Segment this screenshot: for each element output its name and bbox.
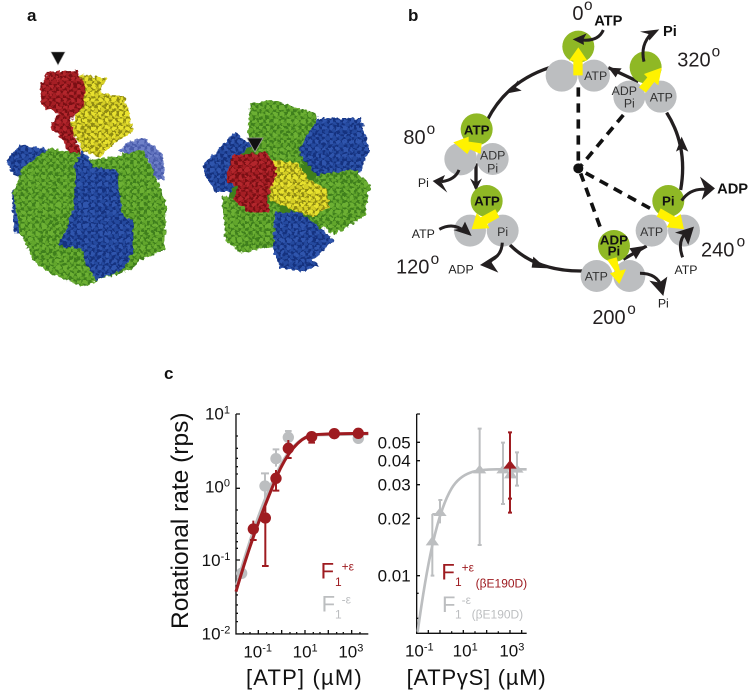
legend F1 -epsilon betaE190D: (βE190D) (472, 608, 523, 622)
x tick labels: 3 (357, 642, 363, 654)
icon: marker triangle (51, 52, 65, 65)
icon: marker triangle top view (247, 138, 263, 152)
y tick labels: -2 (221, 624, 230, 636)
state 120 degrees: ATP (474, 193, 500, 208)
state 200 degrees (581, 230, 669, 329)
x tick labels: 3 (518, 642, 524, 654)
state 320 degrees: o (712, 44, 720, 61)
y tick labels: 0.02 (378, 509, 411, 528)
x tick labels: 10 (338, 642, 357, 661)
x tick labels: 10 (453, 642, 472, 661)
legend F1 +epsilon betaE190D: 1 (455, 575, 462, 589)
y tick labels: 0.05 (378, 433, 411, 452)
state 240 degrees: ADP (717, 181, 748, 197)
legend F1 +epsilon: 1 (335, 575, 342, 589)
x tick labels: 10 (405, 642, 424, 661)
y tick labels: 10 (202, 551, 221, 570)
red series (503, 432, 517, 513)
gray series (418, 429, 527, 632)
state 200 degrees: Pi (608, 243, 620, 258)
panel label b: b (408, 6, 418, 25)
legend F1 +epsilon: F (321, 558, 334, 583)
state 320 degrees: 320 (677, 50, 711, 72)
y axis title: Rotational rate (rps) (167, 412, 194, 629)
protein subunit: red top view (227, 153, 277, 212)
state 80 degrees: Pi (418, 176, 429, 190)
state 80 degrees: 80 (403, 127, 426, 149)
state 240 degrees: Pi (662, 193, 675, 208)
state 80 degrees (403, 113, 509, 193)
y tick labels: 10 (205, 478, 224, 497)
state 200 degrees: ATP (585, 270, 608, 284)
state 200 degrees: ADP (600, 232, 628, 247)
state 80 degrees: o (427, 121, 435, 138)
cycle track arrows (470, 68, 688, 271)
state 240 degrees: 240 (701, 240, 734, 262)
state 320 degrees (612, 24, 720, 113)
state 320 degrees: Pi (663, 24, 677, 40)
panel label c: c (164, 364, 173, 383)
y tick labels: -1 (221, 551, 230, 563)
x tick labels: 10 (293, 642, 312, 661)
panel a: side view of F1 protein (7, 52, 167, 287)
y tick labels: 0.03 (378, 476, 411, 495)
state 0 degrees: 0 (572, 3, 583, 25)
panel b: rotary catalysis cycle (396, 0, 748, 329)
state 0 degrees: ATP (584, 69, 607, 83)
state 0 degrees (546, 0, 623, 92)
state 120 degrees: Pi (497, 225, 508, 239)
legend F1 -epsilon betaE190D: F (442, 592, 455, 617)
protein subunit: green (13, 148, 167, 287)
panel a: top view of F1 protein (203, 100, 370, 272)
legend F1 +epsilon: +ε (342, 560, 355, 574)
x tick labels (243, 642, 363, 661)
state 120 degrees: o (431, 251, 439, 268)
state 320 degrees: ADP (612, 84, 637, 98)
state 200 degrees: 200 (592, 307, 626, 329)
state 120 degrees: ATP (412, 227, 435, 241)
state 200 degrees: o (627, 301, 636, 318)
y tick labels: 0.01 (378, 567, 411, 586)
state 200 degrees: Pi (658, 296, 669, 310)
red series (236, 428, 368, 592)
state 120 degrees (396, 185, 519, 278)
y tick labels: 1 (224, 404, 230, 416)
protein subunit: yellow top view (268, 160, 330, 217)
legend F1 +epsilon betaE190D: F (441, 559, 455, 584)
state 80 degrees: ADP (480, 148, 505, 162)
protein subunit: blue (58, 150, 133, 280)
x tick labels: 10 (243, 642, 262, 661)
panel label a: a (27, 6, 37, 25)
legend F1 +epsilon betaE190D: +ε (462, 560, 475, 574)
x axis title: [ATP] (µM) (246, 665, 362, 690)
y tick labels: 10 (205, 404, 224, 423)
state 0 degrees: ATP (594, 13, 623, 29)
x tick labels: 1 (312, 642, 318, 654)
y tick labels: 0 (224, 478, 230, 490)
state 240 degrees: o (737, 234, 745, 251)
chart: rotational rate vs ATPgammaS (378, 414, 546, 690)
protein subunit: red (40, 70, 85, 157)
x tick labels: 10 (499, 642, 518, 661)
x tick labels: -1 (262, 642, 272, 654)
state 240 degrees (636, 177, 748, 277)
state 320 degrees: ATP (650, 90, 673, 104)
x axis title: [ATPγS] (µM) (407, 665, 546, 690)
state 80 degrees: Pi (487, 161, 498, 175)
x tick labels: 1 (472, 642, 478, 654)
dashed angle lines (573, 87, 650, 227)
axes and ticks (417, 414, 527, 633)
y tick labels (378, 433, 411, 586)
legend F1 -epsilon: -ε (342, 592, 352, 606)
state 320 degrees: Pi (624, 96, 635, 110)
chart: rotational rate vs ATP (202, 404, 368, 690)
state 240 degrees: ATP (640, 225, 663, 239)
x tick labels: -1 (424, 642, 434, 654)
y tick labels (202, 404, 230, 643)
state 120 degrees: ADP (448, 263, 474, 277)
gray series (236, 431, 368, 585)
axes and ticks (236, 414, 368, 634)
x tick labels (405, 642, 524, 661)
protein subunit: yellow (70, 75, 133, 157)
legend F1 -epsilon: 1 (335, 607, 342, 621)
legend F1 -epsilon betaE190D: 1 (455, 608, 462, 622)
state 240 degrees: ATP (674, 263, 698, 277)
y tick labels: 10 (202, 624, 221, 643)
legend F1 +epsilon betaE190D: (βE190D) (476, 576, 527, 590)
state 80 degrees: ATP (464, 122, 490, 137)
legend F1 -epsilon: F (322, 591, 335, 616)
state 120 degrees: 120 (396, 256, 429, 278)
legend F1 -epsilon betaE190D: -ε (462, 593, 472, 607)
y tick labels: 0.04 (378, 452, 411, 471)
